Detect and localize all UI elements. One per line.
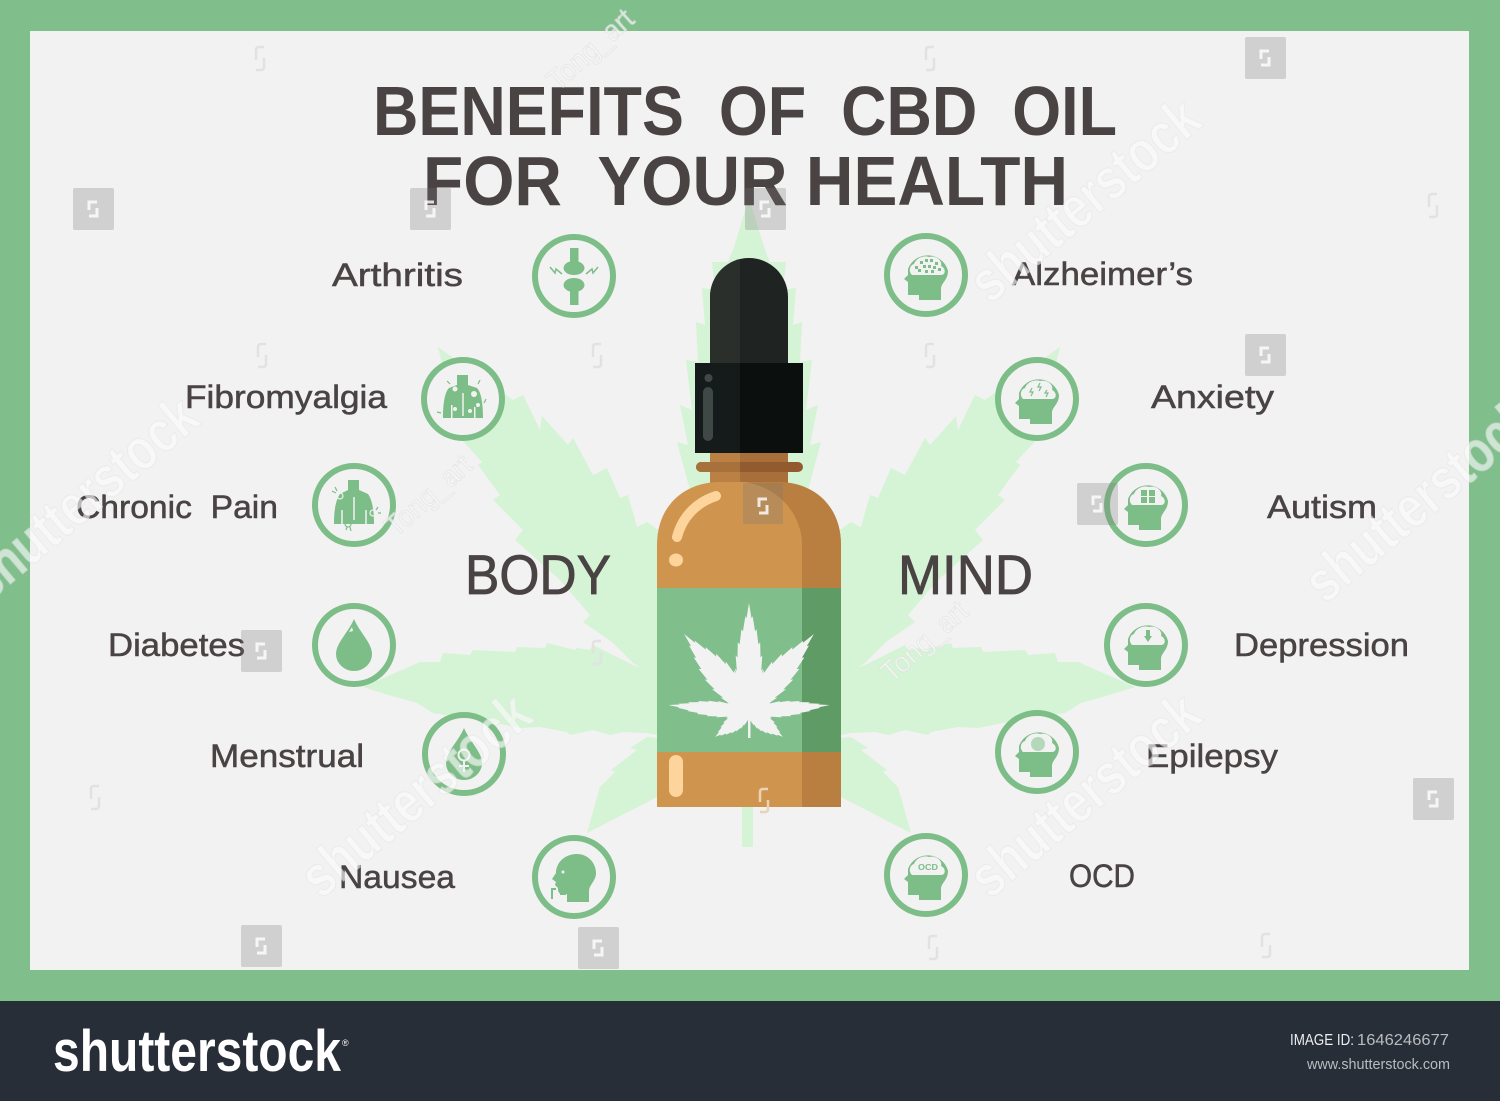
item: Depression xyxy=(1107,606,1409,684)
watermark overlay: Tong_art xyxy=(875,594,975,689)
icon: drop with female symbol xyxy=(425,715,503,793)
item: Nausea: Nausea xyxy=(339,859,455,895)
footer image id xyxy=(1290,1032,1449,1049)
footer image id: IMAGE ID: xyxy=(1290,1032,1354,1049)
neck ring xyxy=(696,462,803,472)
icon: back with pain points xyxy=(315,466,393,544)
item: Fibromyalgia: Fibromyalgia xyxy=(185,379,387,415)
item: Chronic Pain: Chronic Pain xyxy=(76,489,278,525)
icon: head with puzzle blocks xyxy=(1107,466,1185,544)
item: Diabetes: Diabetes xyxy=(108,627,245,663)
icon: head with burst xyxy=(998,713,1076,791)
label band xyxy=(657,588,841,752)
item: OCD xyxy=(887,836,1135,914)
glass body xyxy=(657,482,841,807)
item: Alzheimer's xyxy=(887,236,1193,314)
heading: mind: MIND xyxy=(898,543,1033,606)
cannabis leaf background xyxy=(363,198,1135,847)
item: Arthritis: Arthritis xyxy=(332,257,463,293)
icon: head with down arrow xyxy=(1107,606,1185,684)
title: BENEFITS OF CBD OIL xyxy=(373,72,1117,150)
icon: head with lightning xyxy=(998,360,1076,438)
item: Anxiety: Anxiety xyxy=(1151,379,1274,415)
item: OCD: OCD xyxy=(1069,858,1135,894)
title: FOR YOUR HEALTH xyxy=(423,142,1068,220)
item: Arthritis xyxy=(332,237,613,315)
item: Epilepsy: Epilepsy xyxy=(1146,738,1278,774)
icon: joint xyxy=(535,237,613,315)
item: Epilepsy xyxy=(998,713,1278,791)
item: Fibromyalgia xyxy=(185,360,502,438)
neck xyxy=(710,452,788,484)
watermark overlay: shutterstock xyxy=(957,680,1213,910)
item: Diabetes xyxy=(108,606,393,684)
footer registered mark: ® xyxy=(342,1038,349,1048)
item: Depression: Depression xyxy=(1234,627,1409,663)
item: Menstrual xyxy=(210,715,503,793)
black collar xyxy=(695,363,803,453)
item: Alzheimer's: Alzheimer’s xyxy=(1012,256,1193,292)
footer bar xyxy=(0,1001,1500,1101)
icon: torso with pain points xyxy=(424,360,502,438)
footer image id: 1646246677 xyxy=(1357,1032,1449,1049)
dropper bulb xyxy=(710,258,788,364)
label leaf xyxy=(668,603,830,744)
CBD oil bottle xyxy=(657,258,841,807)
icon: profile head vomiting xyxy=(535,838,613,916)
watermark overlay: shutterstock xyxy=(957,85,1213,315)
title xyxy=(373,72,1117,220)
footer logo: shutterstock xyxy=(53,1019,342,1084)
icon: head with OCD text: OCD xyxy=(918,863,938,872)
item: Anxiety xyxy=(998,360,1274,438)
item: Nausea xyxy=(339,838,613,916)
icon: head with fading brain xyxy=(887,236,965,314)
item: Autism xyxy=(1107,466,1377,544)
watermark overlay: Tong_art xyxy=(379,448,479,543)
item: Chronic Pain xyxy=(76,466,393,544)
item: Menstrual: Menstrual xyxy=(210,738,364,774)
icon: blood drop xyxy=(315,606,393,684)
watermark overlay: shutterstock xyxy=(288,680,544,910)
heading: body: BODY xyxy=(465,543,611,606)
icon: head with OCD text xyxy=(887,836,965,914)
item: Autism: Autism xyxy=(1267,489,1377,525)
footer website: www.shutterstock.com xyxy=(1306,1056,1450,1073)
